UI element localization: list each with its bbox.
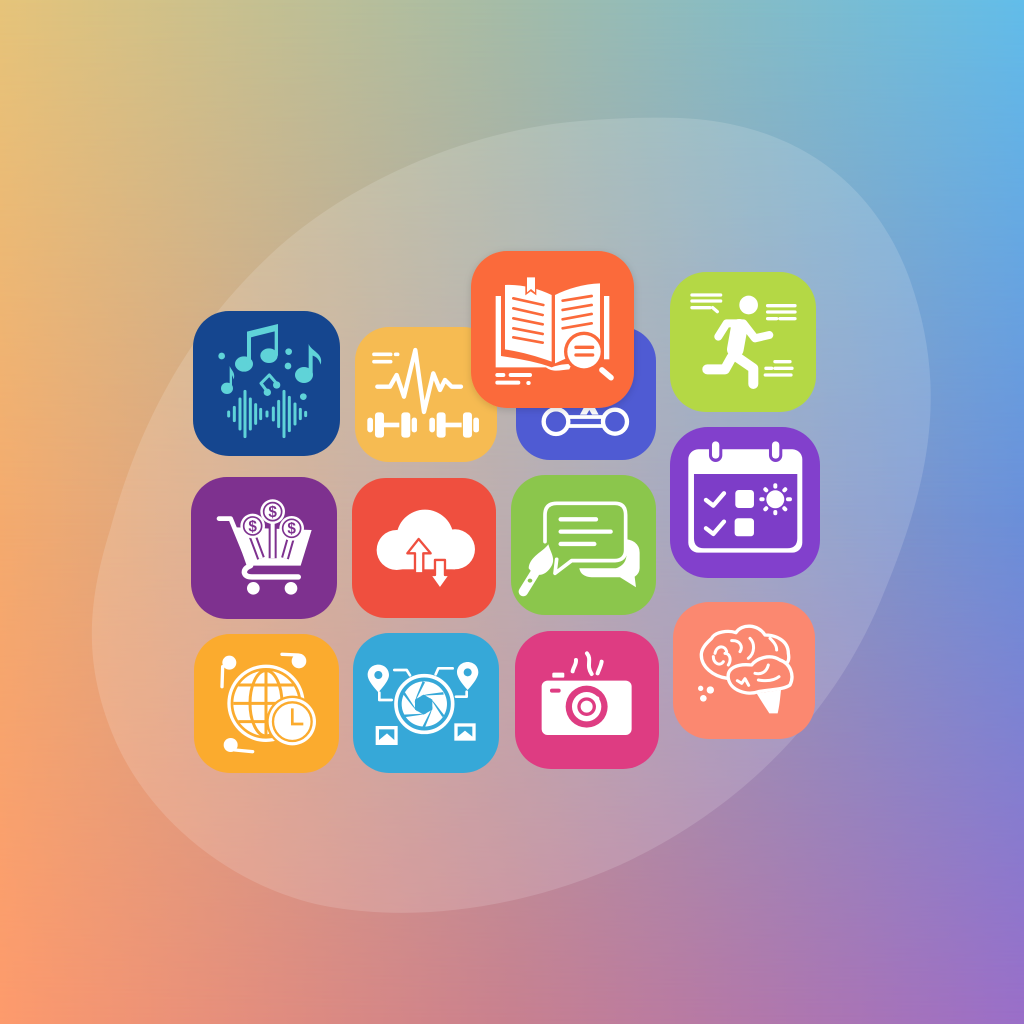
icon: cloud with arrows (377, 510, 475, 589)
icon: cart with coins: $ (268, 504, 277, 521)
tile: aperture and map pins (353, 633, 499, 773)
tile: cloud sync (352, 478, 496, 618)
icon: brain (698, 626, 792, 713)
icon: music notes and waveform (218, 324, 321, 437)
icon: pulse and dumbbells (367, 350, 479, 438)
icon: speech bubbles and paintbrush (523, 503, 640, 592)
icon: connected nodes (544, 406, 627, 434)
icon: running figure (692, 295, 795, 384)
tile: brain (673, 602, 815, 739)
tile: blue connected nodes (516, 327, 656, 460)
tile: camera (515, 631, 659, 769)
tile: runner (670, 272, 816, 412)
icon: steaming camera (542, 653, 632, 735)
icon: book with magnifier (496, 277, 611, 383)
icon: cart with coins: $ (248, 518, 257, 535)
icon: cart with coins (219, 499, 312, 595)
tile: music (193, 311, 340, 456)
tile: chat and brush (511, 475, 656, 615)
translucent background blob (92, 118, 931, 913)
icon: globe with clock (222, 654, 318, 752)
icon: calendar with checks and sun (688, 439, 802, 553)
tile: shopping cart (191, 477, 337, 619)
tile: globe and clock (194, 634, 339, 773)
tile: open book (471, 251, 634, 408)
tile: heart rate and dumbbells (355, 327, 497, 462)
icon: cart with coins: $ (287, 521, 296, 538)
tile: calendar (670, 427, 820, 578)
icon: aperture with pins and photos (368, 662, 478, 745)
